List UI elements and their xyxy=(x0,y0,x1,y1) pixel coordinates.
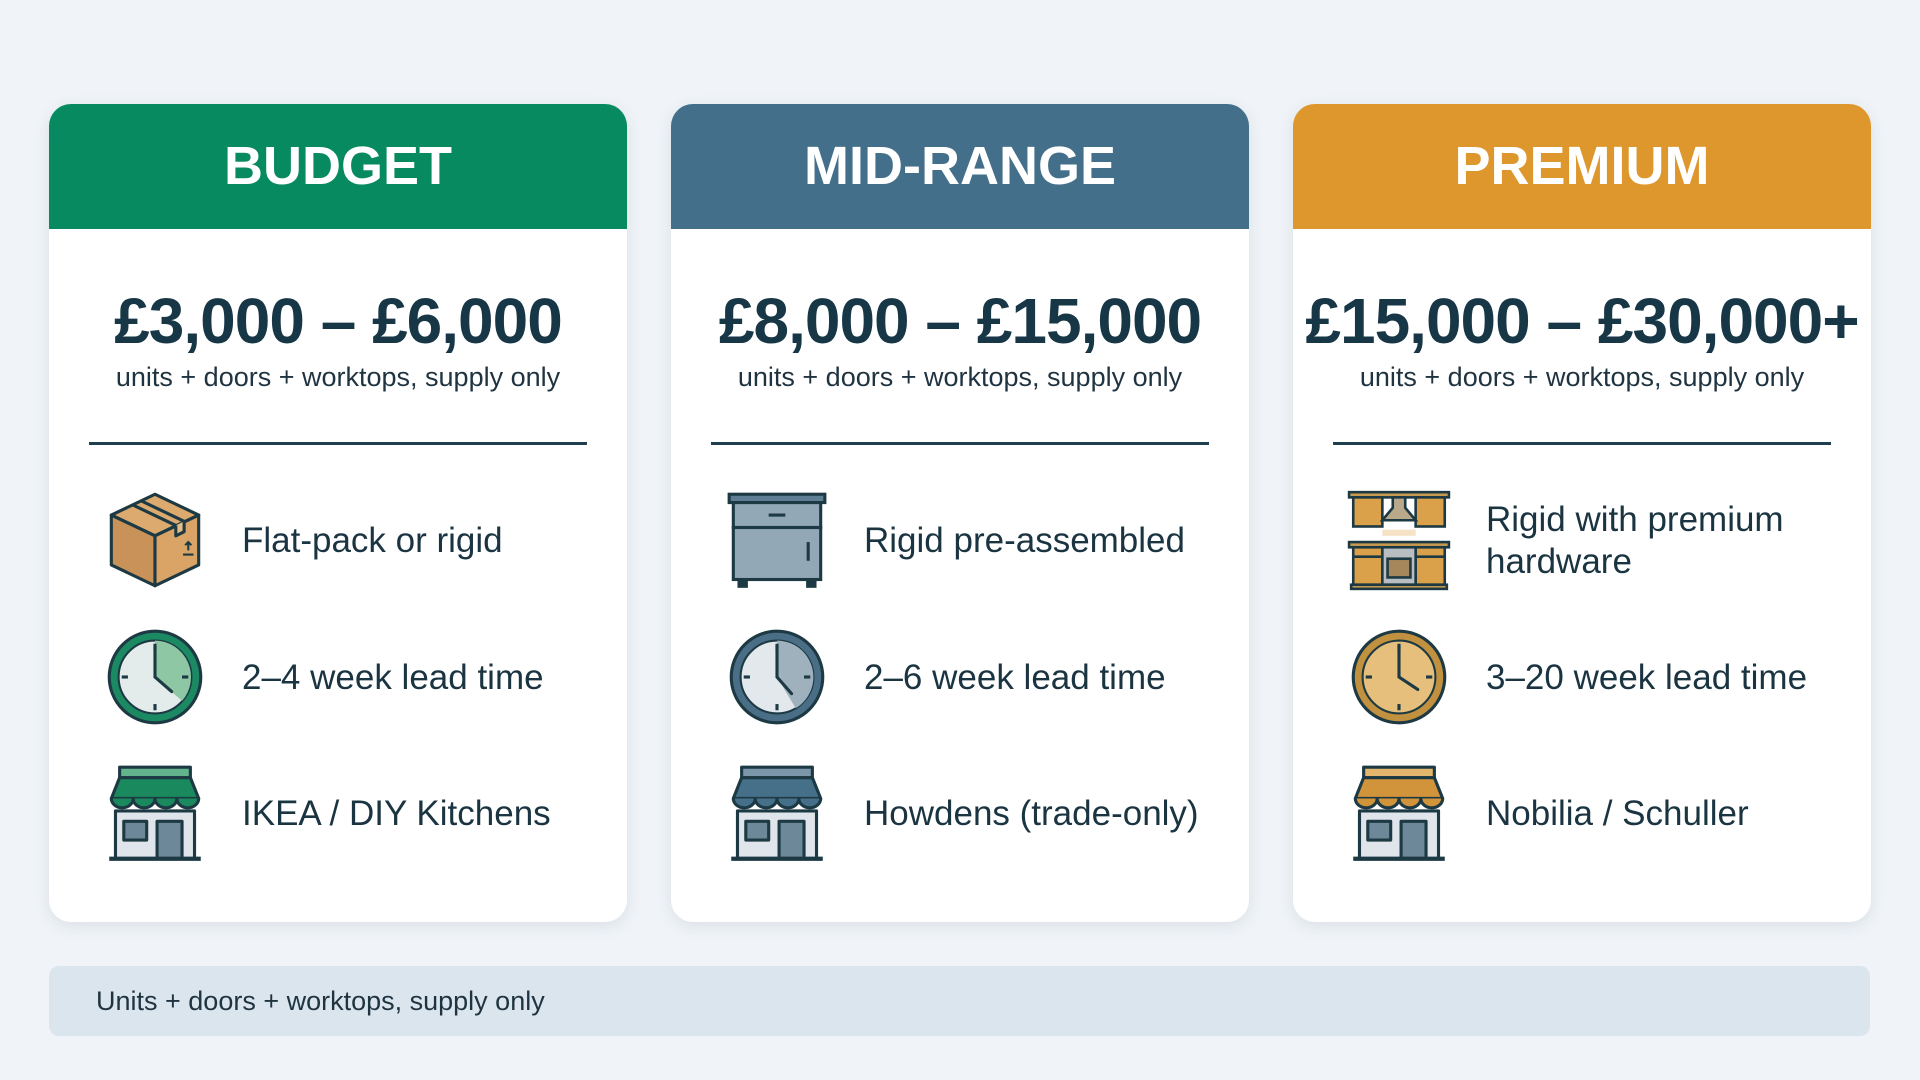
icon: kitchen xyxy=(1348,490,1450,590)
row: premium hardware xyxy=(1348,490,1784,590)
text: Rigid pre-assembled xyxy=(864,521,1185,560)
price: premium: £15,000 – £30,000+ xyxy=(1305,285,1859,357)
icon: clock xyxy=(1352,630,1446,724)
text: Flat-pack or rigid xyxy=(242,521,503,560)
heading: mid-range: MID-RANGE xyxy=(804,136,1116,196)
text: 2–6 week lead time xyxy=(864,658,1166,697)
text xyxy=(1486,500,1784,581)
icon: shop xyxy=(1353,766,1445,861)
text: IKEA / DIY Kitchens xyxy=(242,794,551,833)
heading: budget xyxy=(49,104,627,229)
row: flat-pack xyxy=(110,492,503,588)
text: 3–20 week lead time xyxy=(1486,658,1807,697)
icon: cardboard box xyxy=(110,492,200,588)
panel: budget xyxy=(49,104,627,922)
footer note xyxy=(49,966,1870,1036)
text: 2–4 week lead time xyxy=(242,658,544,697)
subtitle: budget: units + doors + worktops, supply only xyxy=(116,362,560,392)
text: Rigid with premium xyxy=(1486,500,1784,539)
price: budget: £3,000 – £6,000 xyxy=(114,285,562,357)
row: lead time xyxy=(1352,630,1807,724)
row: retailers xyxy=(109,766,551,861)
text: hardware xyxy=(1486,542,1632,581)
text: Nobilia / Schuller xyxy=(1486,794,1749,833)
row: retailer xyxy=(731,766,1199,861)
heading: budget: BUDGET xyxy=(224,136,452,196)
panel: premium xyxy=(1293,104,1871,922)
subtitle: mid-range: units + doors + worktops, supply only xyxy=(738,362,1182,392)
row: lead time xyxy=(730,630,1166,724)
row: retailers xyxy=(1353,766,1749,861)
heading: mid-range xyxy=(671,104,1249,229)
footer note: Units + doors + worktops, supply only xyxy=(96,986,545,1016)
panel: mid-range xyxy=(671,104,1249,922)
icon: clock xyxy=(730,630,824,724)
icon: shop xyxy=(731,766,823,861)
text: Howdens (trade-only) xyxy=(864,794,1199,833)
row: rigid xyxy=(728,492,1185,588)
icon: shop xyxy=(109,766,201,861)
icon: clock xyxy=(108,630,202,724)
heading: premium: PREMIUM xyxy=(1454,136,1710,196)
row: lead time xyxy=(108,630,544,724)
price: mid-range: £8,000 – £15,000 xyxy=(719,285,1201,357)
subtitle: premium: units + doors + worktops, supply only xyxy=(1360,362,1804,392)
icon: cabinet xyxy=(728,492,826,588)
heading: premium xyxy=(1293,104,1871,229)
